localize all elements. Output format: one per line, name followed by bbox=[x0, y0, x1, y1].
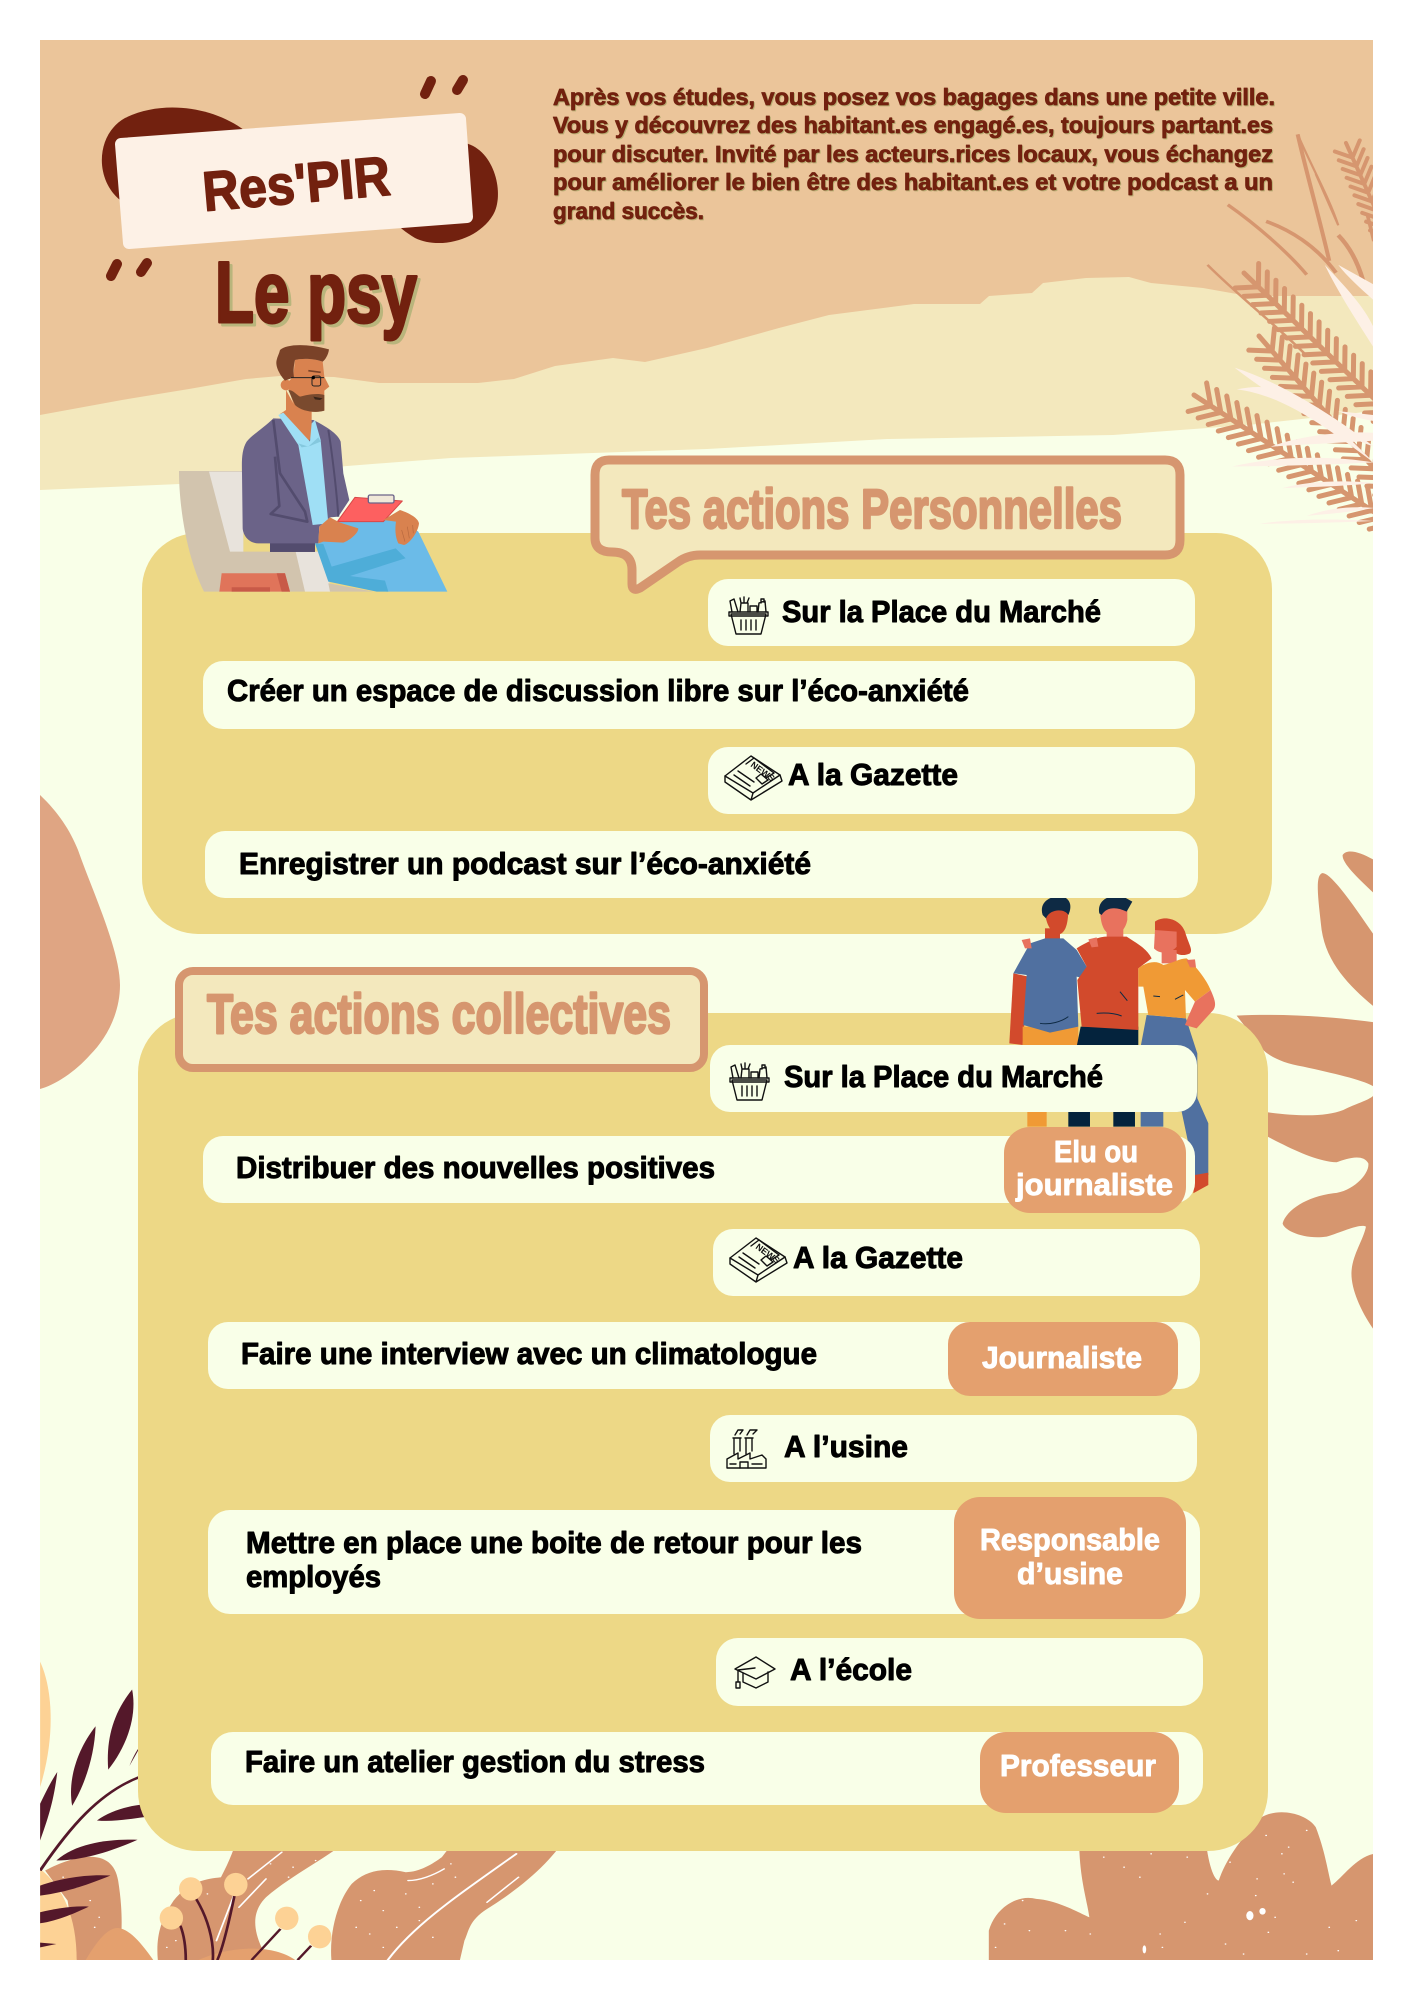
row: A l'école: A l’école bbox=[790, 1652, 912, 1687]
heading bubble: Tes actions Personnelles: Tes actions Personnelles bbox=[622, 477, 1122, 540]
decoration: top right wheat bbox=[1186, 134, 1373, 532]
row: positive news bbox=[203, 1136, 1195, 1203]
row: A la Gazette (collective): A la Gazette bbox=[793, 1240, 963, 1275]
tan header band bbox=[40, 40, 1374, 415]
row: Sur la Place du Marché (personal): Sur la Place du Marché bbox=[782, 594, 1101, 629]
row: Sur la Place du Marché (collective): Sur la Place du Marché bbox=[784, 1059, 1103, 1094]
row: A la Gazette (personal): A la Gazette bbox=[788, 757, 958, 792]
tag: Journaliste: Journaliste bbox=[982, 1340, 1142, 1375]
icon: market basket bbox=[729, 597, 768, 634]
heading box: Tes actions collectives: Tes actions collectives bbox=[207, 982, 671, 1045]
tag: Responsable d'usine bbox=[954, 1497, 1186, 1619]
row: discussion space bbox=[203, 661, 1195, 729]
row: Sur la Place du Marché (personal) bbox=[708, 579, 1195, 646]
icon: factory bbox=[727, 1430, 766, 1468]
row: interview: Faire une interview avec un climatologue bbox=[241, 1336, 817, 1371]
panel: personal actions background bbox=[142, 533, 1272, 934]
row: stress workshop bbox=[211, 1732, 1203, 1805]
intro text: Après vos études, vous posez vos bagages dans une petite ville. bbox=[553, 84, 1275, 110]
intro text: Vous y découvrez des habitant.es engagé.es, toujours partant.es bbox=[553, 112, 1273, 138]
tag: Elu ou journaliste: journaliste bbox=[1015, 1167, 1173, 1202]
icon: newspaper bbox=[730, 1238, 787, 1282]
row: A l'usine: A l’usine bbox=[784, 1429, 908, 1464]
row: discussion space: Créer un espace de discussion libre sur l’éco-anxiété bbox=[227, 673, 969, 708]
tag: Elu ou journaliste: Elu ou bbox=[1054, 1134, 1138, 1169]
icon: graduation cap bbox=[735, 1657, 775, 1688]
logo box bbox=[121, 119, 467, 243]
decoration: right leaves bbox=[1237, 851, 1374, 1330]
quote marks bottom bbox=[111, 263, 147, 276]
row: podcast: Enregistrer un podcast sur l’éco-anxiété bbox=[239, 846, 811, 881]
tag: Elu ou journaliste bbox=[1004, 1127, 1186, 1213]
intro text bbox=[553, 84, 1275, 224]
intro text: pour améliorer le bien être des habitant.es et votre podcast a un bbox=[553, 169, 1273, 195]
row: podcast bbox=[205, 831, 1198, 898]
illustration: psychologist sitting bbox=[179, 345, 447, 592]
row: A l'école bbox=[716, 1638, 1203, 1706]
panel: collective actions background bbox=[138, 1013, 1268, 1851]
heading bubble: Tes actions Personnelles bbox=[595, 460, 1180, 589]
row: stress workshop: Faire un atelier gestion du stress bbox=[245, 1744, 705, 1779]
illustration: group of three people bbox=[1009, 896, 1215, 1193]
row: feedback box: Mettre en place une boite de retour pour les bbox=[246, 1525, 862, 1560]
row: interview bbox=[208, 1322, 1200, 1389]
cream torn paper band bbox=[40, 277, 1373, 490]
heading box: Tes actions collectives bbox=[179, 971, 704, 1068]
icon: market basket bbox=[730, 1063, 769, 1100]
row: Sur la Place du Marché (collective) bbox=[710, 1045, 1197, 1112]
tag: Professeur: Professeur bbox=[1000, 1748, 1156, 1783]
row: feedback box bbox=[208, 1510, 1200, 1614]
title: Le psy: Le psy bbox=[215, 245, 417, 341]
tag: Professeur bbox=[980, 1732, 1179, 1813]
decoration: bottom left plants bbox=[40, 1662, 568, 1960]
icon: newspaper bbox=[725, 756, 782, 800]
row: feedback box: employés bbox=[246, 1559, 381, 1594]
quote marks top bbox=[425, 80, 463, 94]
intro text: pour discuter. Invité par les acteurs.rices locaux, vous échangez bbox=[553, 141, 1273, 167]
intro text: grand succès. bbox=[553, 198, 704, 224]
row: A la Gazette (collective) bbox=[713, 1229, 1200, 1296]
row: A la Gazette (personal) bbox=[708, 747, 1195, 814]
logo text: Res'PIR bbox=[200, 144, 393, 223]
tag: Journaliste bbox=[948, 1322, 1178, 1396]
row: positive news: Distribuer des nouvelles positives bbox=[236, 1150, 715, 1185]
tag: Responsable d'usine: d’usine bbox=[1017, 1556, 1123, 1591]
tag: Responsable d'usine: Responsable bbox=[980, 1522, 1160, 1557]
logo blob: Res'PIR bbox=[102, 107, 498, 243]
decoration: left textured blob bbox=[40, 795, 120, 1089]
row: A l'usine bbox=[710, 1415, 1197, 1482]
decoration: bottom right textured shape bbox=[989, 1812, 1374, 1960]
